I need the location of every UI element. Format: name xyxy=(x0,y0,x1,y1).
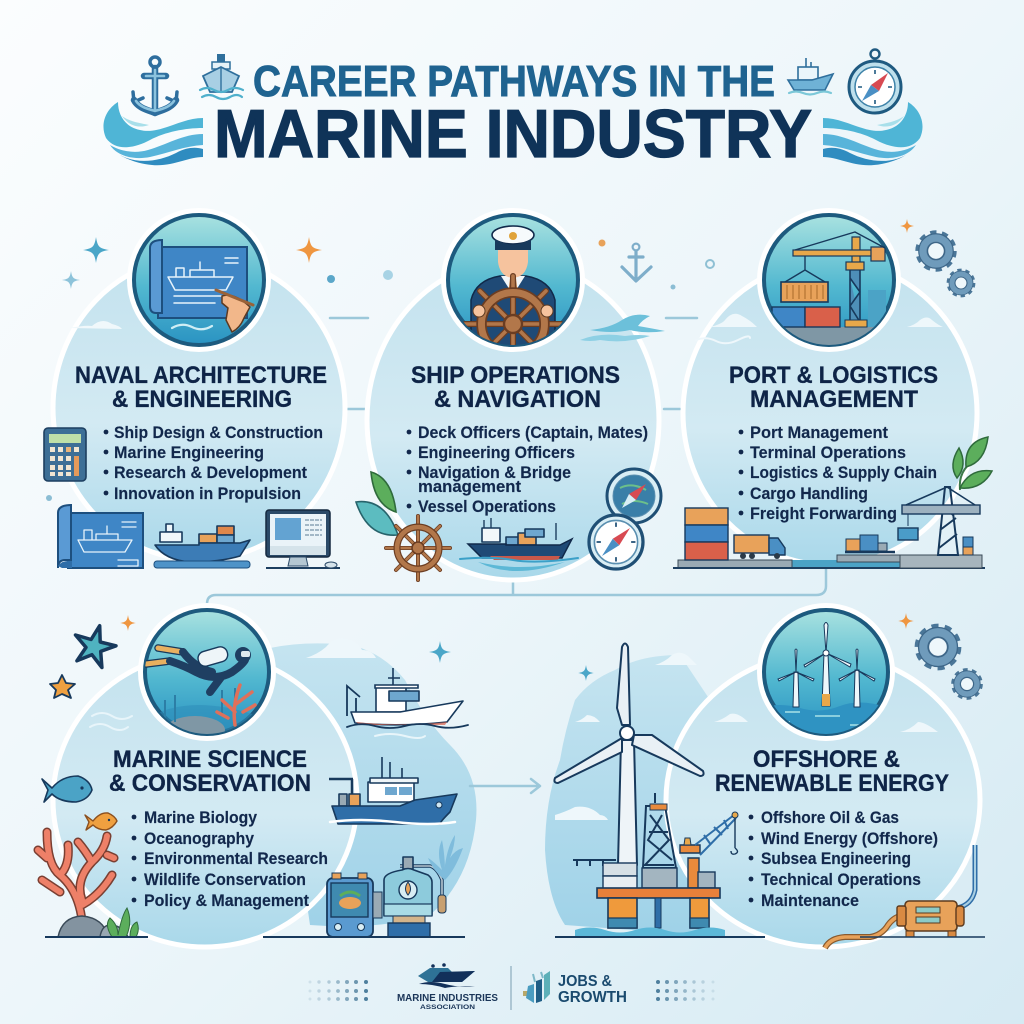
bullet list: Maintenance xyxy=(761,892,859,910)
panel background xyxy=(53,256,345,560)
bullet list: Engineering Officers xyxy=(418,444,575,462)
bullet list: Navigation & Bridge xyxy=(418,464,571,482)
bullet list: Wind Energy (Offshore) xyxy=(761,830,938,848)
icon: gas cylinder xyxy=(263,857,465,937)
heading: PORT & LOGISTICS xyxy=(729,362,938,389)
icon: blueprint badge xyxy=(127,208,271,352)
bullet list: Oceanography xyxy=(144,830,255,848)
logo text: jobs and growth: JOBS & xyxy=(558,973,612,990)
icon: leaves xyxy=(356,472,398,535)
icon: computer xyxy=(266,510,340,568)
panel background xyxy=(53,653,357,947)
icon: title cruise ship xyxy=(200,54,243,99)
icon: starfish xyxy=(76,626,116,668)
panel: naval architecture xyxy=(44,208,345,568)
icon: dockside crane and truck xyxy=(837,487,982,568)
icon: large wind turbine xyxy=(554,644,704,865)
icon: oil rig xyxy=(555,793,765,937)
icon: quay with containers and truck xyxy=(673,508,985,568)
bullet list: Policy & Management xyxy=(144,892,309,910)
dot pattern right xyxy=(656,980,714,1001)
bullet list: Innovation in Propulsion xyxy=(114,485,301,503)
icon: blueprint roll xyxy=(58,505,143,568)
heading line two: & ENGINEERING xyxy=(112,386,292,413)
heading line two: & CONSERVATION xyxy=(109,770,311,797)
icon: left waves xyxy=(103,102,203,165)
heading: OFFSHORE & xyxy=(753,746,900,773)
logo text: jobs and growth: GROWTH xyxy=(558,989,627,1006)
plant silhouette xyxy=(428,835,463,890)
bullet list: Cargo Handling xyxy=(750,485,868,503)
heading: MARINE SCIENCE xyxy=(113,746,307,773)
icon: ship captain badge xyxy=(441,208,585,352)
icon: right waves xyxy=(823,102,923,165)
icon: port crane badge xyxy=(757,208,901,357)
divider xyxy=(510,966,512,1010)
bullet list: Technical Operations xyxy=(761,871,921,889)
title block xyxy=(103,50,923,172)
bullet list: Environmental Research xyxy=(144,850,328,868)
panel: port and logistics xyxy=(673,208,992,568)
panel background xyxy=(666,653,980,947)
bullet list: Wildlife Conservation xyxy=(144,871,306,889)
logo: marine industries ship xyxy=(418,963,475,988)
heading line two: MANAGEMENT xyxy=(750,386,918,413)
bullet list xyxy=(749,809,938,910)
icon: nav compass xyxy=(607,469,661,523)
logo text: marine industries: MARINE INDUSTRIES xyxy=(397,992,498,1004)
icon: container ship on water xyxy=(460,518,578,571)
decoration: gears and sparkles xyxy=(578,613,980,697)
waves xyxy=(90,713,132,730)
icon: subsea pump xyxy=(825,845,985,948)
icon: title compass xyxy=(849,50,901,113)
decorative sparkles xyxy=(46,237,335,501)
icon: research vessel xyxy=(329,757,457,824)
title line two: MARINE INDUSTRY xyxy=(214,96,812,172)
panel background xyxy=(683,261,977,565)
decoration: anchor, dots, wave xyxy=(383,240,676,341)
bullet list: Port Management xyxy=(750,424,889,442)
bullet list: Terminal Operations xyxy=(750,444,906,462)
bullet list: Vessel Operations xyxy=(418,498,556,516)
bullet list xyxy=(132,809,328,910)
logo text: association: ASSOCIATION xyxy=(420,1004,475,1011)
bullet list: Marine Biology xyxy=(144,809,258,827)
bullet list xyxy=(104,424,323,503)
bullet list: Offshore Oil & Gas xyxy=(761,809,899,827)
logo text: jobs and growth xyxy=(558,973,627,1006)
icon: plant leaves xyxy=(953,437,992,490)
blob behind turbine xyxy=(545,655,710,935)
icon: compass xyxy=(589,515,643,569)
icon: title small ship xyxy=(788,58,833,94)
bullet list: Logistics & Supply Chain xyxy=(750,464,937,482)
bullet list: Freight Forwarding xyxy=(750,505,897,523)
heading line two: & NAVIGATION xyxy=(434,386,601,413)
clouds inside panel xyxy=(714,714,938,732)
clouds xyxy=(555,653,697,820)
icon: coral and rocks xyxy=(38,832,148,937)
bullet list: management xyxy=(418,478,522,496)
wave mark xyxy=(696,336,750,343)
panel: ship operations xyxy=(356,208,676,580)
icon: wind farm badge xyxy=(757,603,895,741)
icon: cargo ship xyxy=(154,524,250,568)
bullet list xyxy=(739,424,937,523)
panel background xyxy=(367,260,659,580)
bullet list xyxy=(407,424,648,516)
icon: calculator xyxy=(44,428,86,481)
icon: diver badge xyxy=(138,603,276,744)
icon: sensor device xyxy=(327,873,382,937)
heading: NAVAL ARCHITECTURE xyxy=(75,362,327,389)
dot pattern left xyxy=(308,980,368,1001)
icon: ship wheel xyxy=(386,516,450,580)
icon: research yacht xyxy=(347,668,468,738)
bullet list: Ship Design & Construction xyxy=(114,424,323,442)
title line one: CAREER PATHWAYS IN THE xyxy=(253,57,775,106)
bullet list: Marine Engineering xyxy=(114,444,264,462)
icon: orange fish xyxy=(85,813,117,830)
clouds xyxy=(710,314,943,327)
logo: growth chart xyxy=(523,971,550,1003)
heading line two: RENEWABLE ENERGY xyxy=(715,770,949,797)
decoration: gears and sparkle xyxy=(706,219,973,295)
cloud and sparkles xyxy=(120,615,451,663)
cloud xyxy=(70,321,122,329)
panel: offshore energy xyxy=(545,603,985,948)
arrow between panels xyxy=(470,779,540,793)
heading: SHIP OPERATIONS xyxy=(411,362,620,389)
connector lines xyxy=(207,318,826,604)
icon: blue fish xyxy=(42,776,92,802)
icon: title anchor xyxy=(133,57,177,113)
bullet list: Research & Development xyxy=(114,464,307,482)
footer logos xyxy=(308,963,714,1011)
bullet list: Subsea Engineering xyxy=(761,850,911,868)
blob behind boats xyxy=(270,643,476,926)
bullet list: Deck Officers (Captain, Mates) xyxy=(418,424,648,442)
icon: orange star xyxy=(50,675,75,698)
panel: marine science xyxy=(38,603,476,947)
